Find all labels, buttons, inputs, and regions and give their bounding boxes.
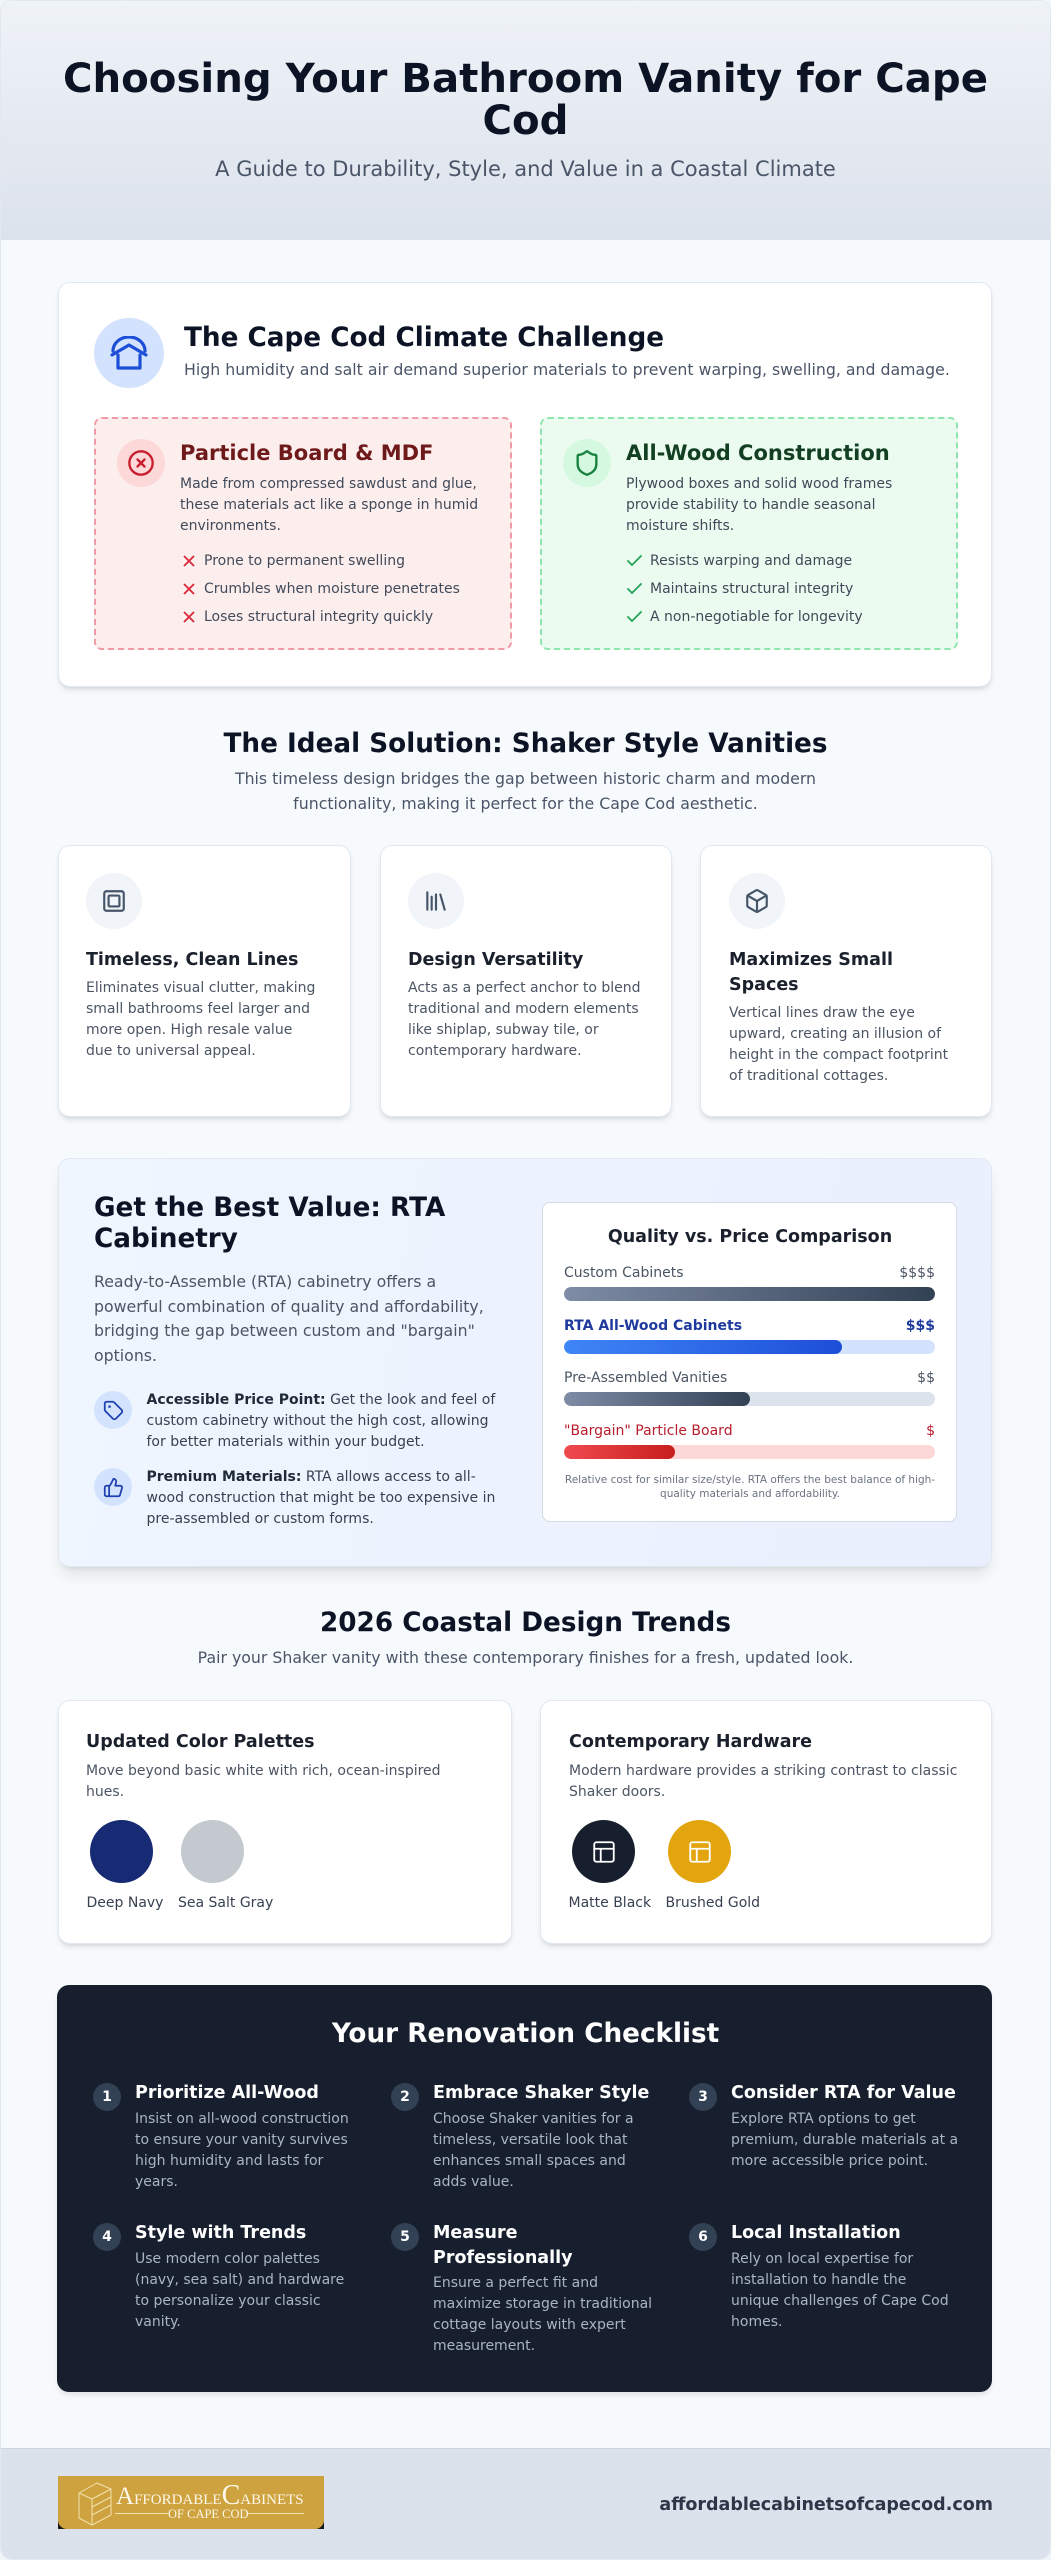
icon: x circle	[117, 439, 165, 487]
benefit: price point: for better materials within your budget.	[146, 1434, 425, 1450]
swatch: sea salt gray	[181, 1820, 244, 1883]
row: RTA	[564, 1318, 935, 1354]
chart note: quality materials and affordability.	[660, 1488, 840, 1500]
intro text	[234, 769, 816, 813]
step 4: Style with Trends	[135, 2223, 306, 2243]
row: bargain: "Bargain" Particle Board	[564, 1423, 733, 1439]
icon: shield	[563, 439, 611, 487]
card text: Shaker doors.	[569, 1784, 665, 1800]
card: versatility	[380, 845, 672, 1117]
step 5: 5	[400, 2229, 410, 2245]
list: benefits: A non-negotiable for longevity	[650, 609, 863, 625]
chart note	[565, 1474, 935, 1500]
row: pre-assembled: $$	[917, 1370, 935, 1386]
card: small spaces	[700, 845, 992, 1117]
card description: provide stability to handle seasonal	[626, 497, 876, 513]
step 6: 6	[698, 2229, 708, 2245]
step 5: Measure	[433, 2223, 517, 2243]
list: drawbacks: Crumbles when moisture penetrates	[204, 581, 460, 597]
step 6: Rely on local expertise for	[731, 2251, 913, 2267]
paragraph: bridging the gap between custom and "bargain"	[94, 1321, 475, 1340]
step 3: premium, durable materials at a	[731, 2132, 958, 2148]
swatch: deep navy	[90, 1820, 153, 1883]
paragraph: options.	[94, 1346, 157, 1365]
card text: small bathrooms feel larger and	[86, 1001, 310, 1017]
trends intro: Pair your Shaker vanity with these contemporary finishes for a fresh, updated look.	[198, 1648, 853, 1667]
step 6: installation to handle the	[731, 2272, 906, 2288]
step 3: more accessible price point.	[731, 2153, 928, 2169]
card title: Timeless, Clean Lines	[86, 950, 298, 970]
step 1: 1	[102, 2089, 112, 2105]
swatch: brushed gold	[668, 1820, 731, 1883]
step 5: Ensure a perfect fit and	[433, 2275, 598, 2291]
heading	[94, 1193, 446, 1254]
panel: particle board	[94, 417, 512, 650]
step 1: high humidity and lasts for	[135, 2153, 323, 2169]
card title: All-Wood Construction	[626, 441, 890, 465]
step 2: adds value.	[433, 2174, 514, 2190]
panel: climate challenge	[58, 282, 992, 687]
footer	[0, 2448, 1051, 2560]
step 4: (navy, sea salt) and hardware	[135, 2272, 344, 2288]
icons: check marks	[627, 555, 642, 622]
benefit: materials: pre-assembled or custom forms.	[146, 1511, 374, 1527]
card text: Acts as a perfect anchor to blend	[408, 980, 640, 996]
card text: contemporary hardware.	[408, 1043, 582, 1059]
paragraph: powerful combination of quality and affordability,	[94, 1297, 484, 1316]
card: color palettes	[58, 1700, 512, 1944]
step 6: Local Installation	[731, 2223, 901, 2243]
step 2: timeless, versatile look that	[433, 2132, 628, 2148]
card text	[408, 980, 640, 1059]
logo: OF CAPE COD	[168, 2507, 249, 2521]
list: drawbacks	[204, 553, 460, 625]
swatch label: Brushed Gold	[666, 1895, 760, 1911]
benefit: price point	[146, 1392, 496, 1450]
icon: frame	[86, 873, 142, 929]
card text: Move beyond basic white with rich, ocean-inspired	[86, 1763, 441, 1779]
icons: x marks	[183, 555, 195, 623]
step 1: Insist on all-wood construction	[135, 2111, 349, 2127]
swatch: matte black	[572, 1820, 635, 1883]
card text: of traditional cottages.	[729, 1068, 888, 1084]
step 5: Professionally	[433, 2248, 572, 2268]
row: custom: $$$$	[899, 1265, 935, 1281]
logo: AFFORDABLECABINETS	[116, 2480, 304, 2511]
card title: Design Versatility	[408, 950, 583, 970]
icon: box	[729, 873, 785, 929]
step 5: maximize storage in traditional	[433, 2296, 652, 2312]
step 1: to ensure your vanity survives	[135, 2132, 348, 2148]
website url: affordablecabinetsofcapecod.com	[659, 2495, 993, 2515]
card title: Updated Color Palettes	[86, 1732, 315, 1752]
card text	[86, 980, 315, 1059]
card text: Eliminates visual clutter, making	[86, 980, 315, 996]
card title: Spaces	[729, 975, 799, 995]
step 2: Choose Shaker vanities for a	[433, 2111, 634, 2127]
panel: RTA value	[58, 1158, 992, 1567]
step 4: 4	[102, 2229, 112, 2245]
paragraph: Ready-to-Assemble (RTA) cabinetry offers a	[94, 1272, 436, 1291]
logo	[58, 2476, 324, 2529]
card title: Contemporary Hardware	[569, 1732, 812, 1752]
card description	[180, 476, 478, 534]
benefit: materials: Premium Materials: RTA allows access to all-	[146, 1469, 476, 1485]
step 3	[689, 2083, 958, 2169]
row: bargain: $	[926, 1423, 935, 1439]
step 5: cottage layouts with expert	[433, 2317, 626, 2333]
step 3: Consider RTA for Value	[731, 2083, 956, 2103]
step 5: measurement.	[433, 2338, 535, 2354]
row: pre-assembled	[564, 1370, 935, 1406]
step 4: vanity.	[135, 2314, 181, 2330]
panel: checklist	[57, 1985, 992, 2392]
card text	[86, 1763, 441, 1800]
chart title: Quality vs. Price Comparison	[608, 1227, 892, 1247]
icon: humidity house	[94, 318, 164, 388]
card title: Particle Board & MDF	[180, 441, 433, 465]
swatch label: Sea Salt Gray	[178, 1895, 273, 1911]
card description: environments.	[180, 518, 281, 534]
card description: Made from compressed sawdust and glue,	[180, 476, 477, 492]
card text: more open. High resale value	[86, 1022, 292, 1038]
benefit: price point: custom cabinetry without the high cost, allowing	[146, 1413, 488, 1429]
title: Cod	[482, 98, 568, 144]
heading: trends: 2026 Coastal Design Trends	[320, 1608, 731, 1638]
step 4: to personalize your classic	[135, 2293, 321, 2309]
icon: library	[408, 873, 464, 929]
card text: hues.	[86, 1784, 124, 1800]
step 1	[93, 2083, 349, 2190]
header	[0, 0, 1051, 240]
icon: tag	[94, 1391, 132, 1429]
step 1: Prioritize All-Wood	[135, 2083, 319, 2103]
heading: Cabinetry	[94, 1224, 238, 1254]
step 3: 3	[698, 2089, 708, 2105]
title	[63, 56, 988, 144]
step 2: 2	[400, 2089, 410, 2105]
swatch label: Deep Navy	[86, 1895, 163, 1911]
card title: Maximizes Small	[729, 950, 893, 970]
card text: Vertical lines draw the eye	[729, 1005, 915, 1021]
step 6: homes.	[731, 2314, 782, 2330]
row: RTA: RTA All-Wood Cabinets	[564, 1318, 742, 1334]
row: RTA: $$$	[906, 1318, 935, 1334]
heading: Get the Best Value: RTA	[94, 1193, 445, 1223]
list: drawbacks: Loses structural integrity quickly	[204, 609, 433, 625]
card text	[729, 1005, 948, 1084]
benefit: materials	[146, 1469, 495, 1527]
step 5	[391, 2223, 652, 2354]
card text: traditional and modern elements	[408, 1001, 639, 1017]
paragraph	[94, 1272, 484, 1365]
card: hardware	[540, 1700, 992, 1944]
intro text: functionality, making it perfect for the Cape Cod aesthetic.	[293, 794, 758, 813]
intro text: This timeless design bridges the gap between historic charm and modern	[235, 769, 816, 788]
card description: Plywood boxes and solid wood frames	[626, 476, 892, 492]
card text: height in the compact footprint	[729, 1047, 948, 1063]
step 6	[689, 2223, 949, 2330]
card text: due to universal appeal.	[86, 1043, 256, 1059]
step 1: years.	[135, 2174, 178, 2190]
list: benefits: Resists warping and damage	[650, 553, 852, 569]
card description: moisture shifts.	[626, 518, 734, 534]
panel: all-wood	[540, 417, 958, 650]
list: benefits: Maintains structural integrity	[650, 581, 853, 597]
step 2	[391, 2083, 649, 2190]
row: custom	[564, 1265, 935, 1301]
card title	[729, 950, 893, 995]
list: benefits	[650, 553, 863, 625]
chart: quality vs price	[542, 1202, 956, 1522]
title: Choosing Your Bathroom Vanity for Cape	[63, 56, 988, 102]
row: pre-assembled: Pre-Assembled Vanities	[564, 1370, 727, 1386]
row: bargain	[564, 1423, 935, 1459]
card text: Modern hardware provides a striking contrast to classic	[569, 1763, 957, 1779]
heading: ideal solution: The Ideal Solution: Shaker Style Vanities	[224, 729, 827, 759]
chart note: Relative cost for similar size/style. RTA offers the best balance of high-	[565, 1474, 935, 1486]
icon: thumbs up	[94, 1468, 132, 1506]
heading: Your Renovation Checklist	[332, 2019, 719, 2049]
section description: High humidity and salt air demand superior materials to prevent warping, swelling, and damage.	[184, 360, 950, 379]
section heading: The Cape Cod Climate Challenge	[184, 323, 664, 353]
step 2: Embrace Shaker Style	[433, 2083, 649, 2103]
row: custom: Custom Cabinets	[564, 1265, 684, 1281]
card text	[569, 1763, 957, 1800]
step 4: Use modern color palettes	[135, 2251, 320, 2267]
step 6: unique challenges of Cape Cod	[731, 2293, 949, 2309]
subtitle: A Guide to Durability, Style, and Value in a Coastal Climate	[215, 157, 836, 181]
swatch label: Matte Black	[568, 1895, 651, 1911]
card text: like shiplap, subway tile, or	[408, 1022, 599, 1038]
list: drawbacks: Prone to permanent swelling	[204, 553, 405, 569]
card: timeless	[58, 845, 351, 1117]
card description	[626, 476, 892, 534]
step 3: Explore RTA options to get	[731, 2111, 916, 2127]
step 4	[93, 2223, 344, 2330]
benefit: materials: wood construction that might be too expensive in	[146, 1490, 495, 1506]
card text: upward, creating an illusion of	[729, 1026, 941, 1042]
card description: these materials act like a sponge in humid	[180, 497, 478, 513]
benefit: price point: Accessible Price Point: Get the look and feel of	[146, 1392, 495, 1408]
step 2: enhances small spaces and	[433, 2153, 626, 2169]
